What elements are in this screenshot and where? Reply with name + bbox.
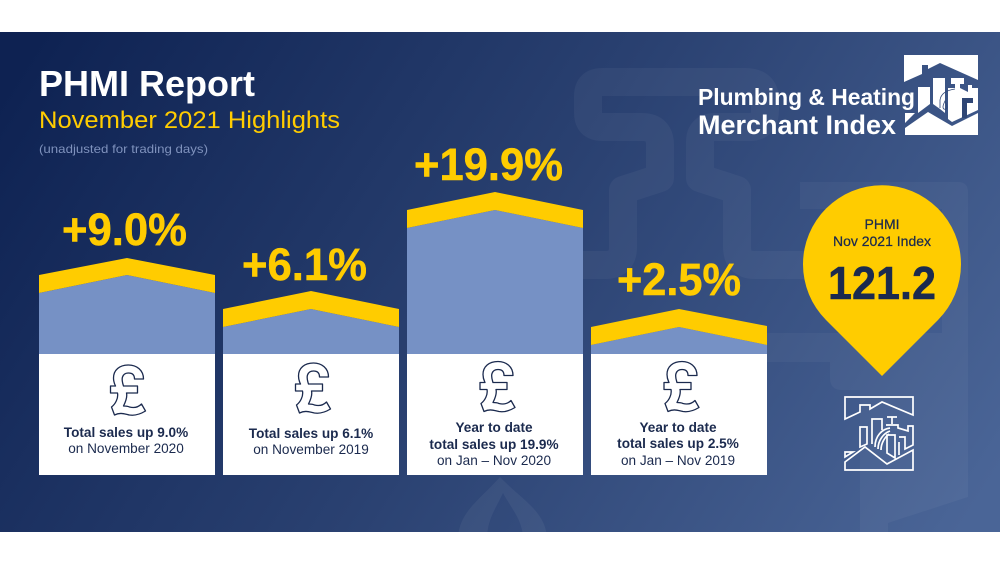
note: (unadjusted for trading days) bbox=[39, 142, 208, 156]
caption: on Jan – Nov 2019 bbox=[621, 453, 735, 468]
caption: Total sales up 6.1% bbox=[249, 426, 373, 441]
caption bbox=[429, 420, 559, 468]
value: +6.1% bbox=[242, 239, 367, 290]
panel: year to date on Jan – Nov 2020 bbox=[407, 139, 583, 475]
logo: Plumbing & Heating Merchant Index bbox=[698, 55, 978, 140]
icon: pound bbox=[110, 365, 146, 415]
caption bbox=[64, 425, 188, 456]
logo wordmark: Plumbing & Heating bbox=[698, 84, 915, 110]
icon: pound bbox=[480, 362, 515, 412]
icon: pound bbox=[296, 363, 330, 413]
icon: pound bbox=[664, 362, 699, 412]
caption: total sales up 2.5% bbox=[617, 436, 739, 451]
caption: on Jan – Nov 2020 bbox=[437, 453, 551, 468]
bar cap bbox=[407, 192, 583, 228]
caption: on November 2019 bbox=[253, 442, 369, 457]
caption: Year to date bbox=[639, 420, 717, 435]
bar cap bbox=[39, 258, 215, 293]
panel: year to date on Jan – Nov 2019 bbox=[591, 254, 767, 475]
caption: Year to date bbox=[455, 420, 533, 435]
pin label: PHMI bbox=[864, 216, 900, 232]
logo mark bbox=[904, 55, 978, 135]
card bbox=[223, 354, 399, 475]
caption: on November 2020 bbox=[68, 441, 184, 456]
bar bbox=[39, 275, 215, 354]
bar bbox=[407, 210, 583, 354]
background pipework watermark bbox=[459, 68, 732, 532]
card bbox=[407, 354, 583, 475]
bar bbox=[223, 309, 399, 354]
pin label: Nov 2021 Index bbox=[833, 233, 931, 249]
value: +19.9% bbox=[414, 139, 563, 190]
subtitle: November 2021 Highlights bbox=[39, 107, 340, 134]
caption: total sales up 19.9% bbox=[429, 437, 559, 452]
pin callout bbox=[803, 185, 961, 376]
icon: house and tap outline bbox=[845, 397, 913, 470]
bar cap bbox=[591, 309, 767, 345]
logo wordmark bbox=[698, 84, 915, 140]
card bbox=[39, 354, 215, 475]
value: +2.5% bbox=[617, 254, 741, 305]
panel: total sales on November 2020 bbox=[39, 204, 215, 475]
title: PHMI Report bbox=[39, 63, 255, 104]
title block bbox=[39, 63, 340, 156]
pin value: 121.2 bbox=[828, 257, 936, 309]
caption bbox=[617, 420, 739, 468]
card bbox=[591, 354, 767, 475]
bar cap bbox=[223, 291, 399, 327]
bar bbox=[591, 327, 767, 354]
logo wordmark: Merchant Index bbox=[698, 110, 896, 140]
panel: total sales on November 2019 bbox=[223, 239, 399, 475]
caption: Total sales up 9.0% bbox=[64, 425, 188, 440]
pin label bbox=[833, 216, 931, 249]
caption bbox=[249, 426, 373, 457]
value: +9.0% bbox=[62, 204, 187, 255]
pin shape bbox=[803, 185, 961, 376]
